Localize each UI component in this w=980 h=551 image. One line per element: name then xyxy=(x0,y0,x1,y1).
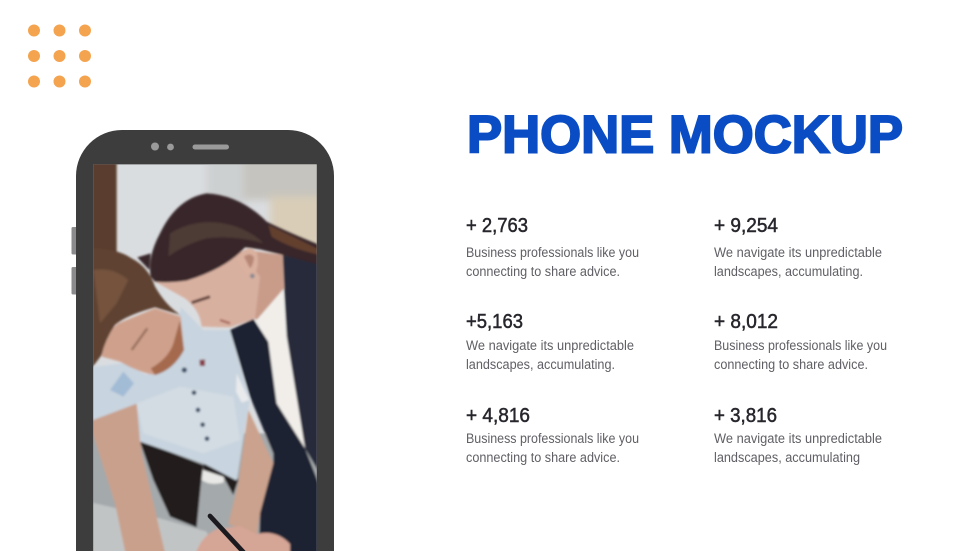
man's hair xyxy=(93,250,180,367)
stat: 2,763 xyxy=(466,215,639,279)
phone side buttons xyxy=(72,227,78,294)
stat: 5,163: +5,163 xyxy=(466,311,523,333)
woman's neck xyxy=(254,250,286,320)
hands xyxy=(193,526,290,551)
title: PHONE MOCKUP xyxy=(467,106,903,164)
stat: 9,254: landscapes, accumulating. xyxy=(714,264,863,279)
woman's hair xyxy=(150,193,337,282)
man's right arm xyxy=(228,410,273,535)
stat: 8,012: + 8,012 xyxy=(714,311,778,333)
man's left arm xyxy=(93,403,166,551)
woman's sleeve cuff xyxy=(236,373,249,403)
phone body xyxy=(76,130,334,551)
man's beard xyxy=(151,320,184,375)
stat: 9,254: We navigate its unpredictable xyxy=(714,245,882,260)
stat: 2,763: Business professionals like you xyxy=(466,245,639,260)
stat: 3,816: landscapes, accumulating xyxy=(714,450,860,465)
stat: 4,816: connecting to share advice. xyxy=(466,450,620,465)
stat: 3,816: + 3,816 xyxy=(714,405,777,427)
stat: 5,163 xyxy=(466,311,634,372)
woman's face xyxy=(155,250,260,327)
stat: 4,816: Business professionals like you xyxy=(466,431,639,446)
stat: 2,763: connecting to share advice. xyxy=(466,264,620,279)
phone screen photo: two colleagues at a desk xyxy=(93,164,317,551)
decorative dot grid xyxy=(28,24,91,88)
stat: 9,254: + 9,254 xyxy=(714,215,778,237)
stat: 8,012: Business professionals like you xyxy=(714,338,887,353)
pen xyxy=(210,516,243,551)
stat: 5,163: We navigate its unpredictable xyxy=(466,338,634,353)
table xyxy=(80,433,333,551)
background post xyxy=(80,150,117,257)
phone camera and speaker xyxy=(151,142,229,150)
man's face xyxy=(102,308,184,375)
woman's blouse xyxy=(255,288,305,448)
woman's ear xyxy=(241,247,258,270)
shirt buttons xyxy=(182,367,209,441)
man's shirt xyxy=(80,307,250,481)
phone mockup xyxy=(72,130,337,551)
woman's blazer xyxy=(230,319,320,551)
stat: 4,816 xyxy=(466,405,639,465)
stat: 8,012 xyxy=(714,311,887,372)
stat: 3,816 xyxy=(714,405,882,465)
stat: 4,816: + 4,816 xyxy=(466,405,530,427)
stat: 8,012: connecting to share advice. xyxy=(714,357,868,372)
stat: 5,163: landscapes, accumulating. xyxy=(466,357,615,372)
stat: 2,763: + 2,763 xyxy=(466,215,528,237)
stat: 9,254 xyxy=(714,215,882,279)
man's trousers xyxy=(139,440,203,527)
stat: 3,816: We navigate its unpredictable xyxy=(714,431,882,446)
